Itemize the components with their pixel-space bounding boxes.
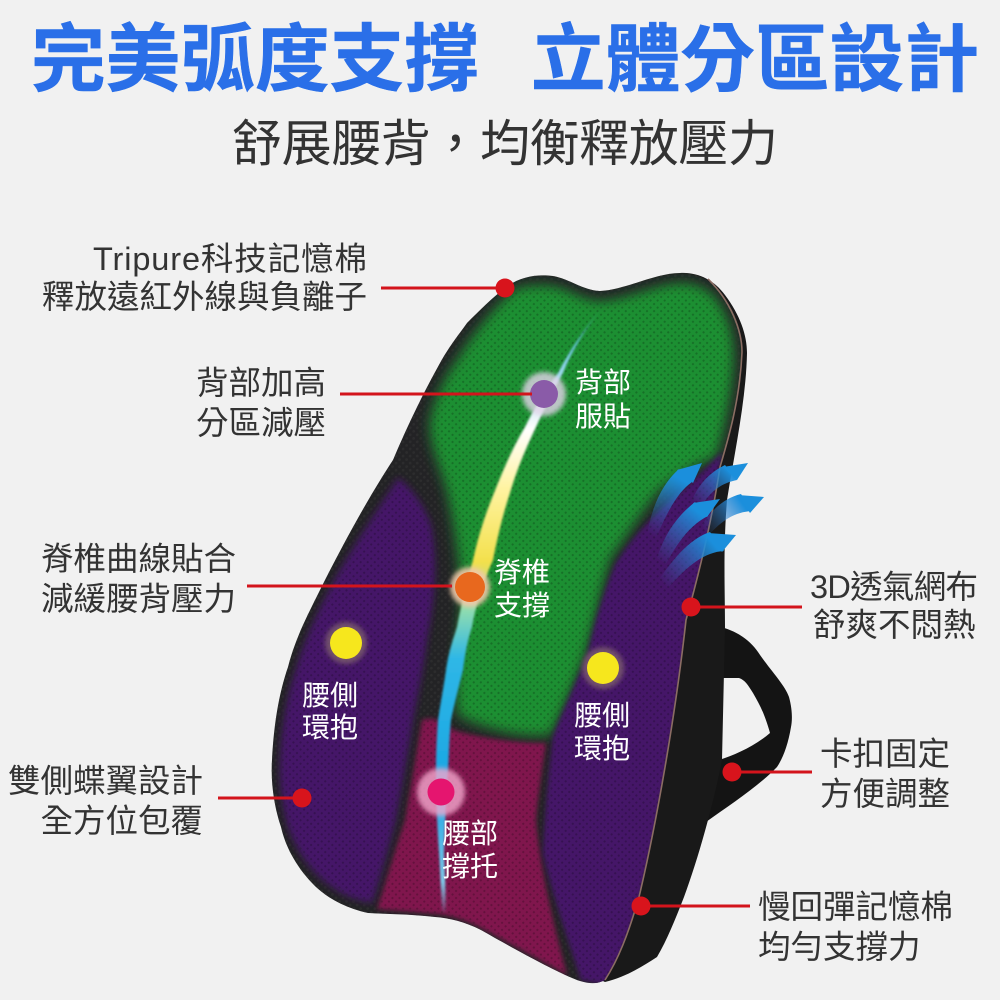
inner label: lumbar support bbox=[442, 818, 498, 882]
callout: raised back: 分區減壓 bbox=[196, 405, 326, 441]
callout: memory foam bbox=[632, 889, 953, 965]
marker: purple back bbox=[522, 372, 566, 416]
callout: 3D mesh bbox=[682, 569, 978, 643]
callout: memory foam: 慢回彈記憶棉 bbox=[758, 889, 953, 925]
callout: Tripure foam: Tripure科技記憶棉 bbox=[93, 241, 367, 277]
inner label: left waist: 環抱 bbox=[302, 712, 358, 743]
callout: butterfly wings: 雙側蝶翼設計 bbox=[8, 763, 203, 799]
title: 完美弧度支撐 bbox=[31, 18, 479, 101]
inner label: right waist: 腰側 bbox=[574, 700, 630, 731]
arrow 4 bbox=[702, 494, 764, 536]
callout: Tripure foam: 釋放遠紅外線與負離子 bbox=[42, 279, 367, 315]
callout: 3D mesh: 3D透氣網布 bbox=[810, 569, 978, 605]
title bbox=[31, 18, 979, 101]
inner label: back fit: 背部 bbox=[575, 367, 631, 398]
callout: raised back: 背部加高 bbox=[196, 365, 326, 401]
inner label: right waist: 環抱 bbox=[574, 733, 630, 764]
callout: spine curve: 脊椎曲線貼合 bbox=[41, 541, 236, 577]
inner label: left waist bbox=[302, 680, 358, 743]
panel: right purple wing bbox=[543, 452, 722, 985]
arrow 2 bbox=[692, 463, 748, 505]
cushion front bbox=[260, 260, 760, 1000]
callout: buckle: 方便調整 bbox=[820, 776, 950, 812]
front seam edge bbox=[605, 279, 742, 980]
arrow 3 bbox=[657, 499, 720, 564]
inner label: left waist: 腰側 bbox=[302, 680, 358, 711]
spine curve bbox=[436, 309, 601, 912]
subtitle: 舒展腰背，均衡釋放壓力 bbox=[232, 116, 778, 172]
title: 立體分區設計 bbox=[531, 18, 979, 101]
inner label: lumbar support: 腰部 bbox=[442, 818, 498, 849]
inner label: right waist bbox=[574, 700, 630, 764]
panel: green upper back bbox=[430, 283, 734, 736]
callout: 3D mesh: 舒爽不悶熱 bbox=[813, 607, 976, 643]
callout: butterfly wings bbox=[8, 763, 312, 839]
inner label: spine support: 支撐 bbox=[494, 590, 550, 621]
marker: pink lumbar bbox=[417, 768, 465, 816]
callout: raised back bbox=[196, 365, 532, 441]
callout: butterfly wings: 全方位包覆 bbox=[40, 803, 203, 839]
callout: spine curve bbox=[41, 541, 452, 617]
inner label: spine support: 脊椎 bbox=[494, 557, 550, 588]
callout: buckle bbox=[722, 736, 950, 812]
inner label: back fit: 服貼 bbox=[575, 401, 631, 432]
marker: yellow right bbox=[582, 647, 624, 689]
panel: left purple wing bbox=[280, 478, 435, 903]
marker: yellow left bbox=[325, 622, 367, 664]
inner label: lumbar support: 撐托 bbox=[442, 851, 498, 882]
callout: memory foam: 均勻支撐力 bbox=[758, 929, 921, 965]
cushion back side bbox=[590, 273, 747, 982]
arrow 1 bbox=[647, 463, 702, 538]
callout: spine curve: 減緩腰背壓力 bbox=[41, 581, 236, 617]
inner label: back fit bbox=[575, 367, 631, 432]
back strap bbox=[700, 627, 792, 822]
callout: buckle: 卡扣固定 bbox=[820, 736, 950, 772]
arrow 5 bbox=[660, 532, 736, 588]
icon: airflow arrows bbox=[647, 463, 764, 588]
callout: Tripure foam bbox=[42, 241, 514, 315]
marker: orange spine bbox=[450, 567, 490, 607]
panel: magenta lumbar bbox=[377, 719, 567, 975]
inner label: spine support bbox=[494, 557, 550, 621]
